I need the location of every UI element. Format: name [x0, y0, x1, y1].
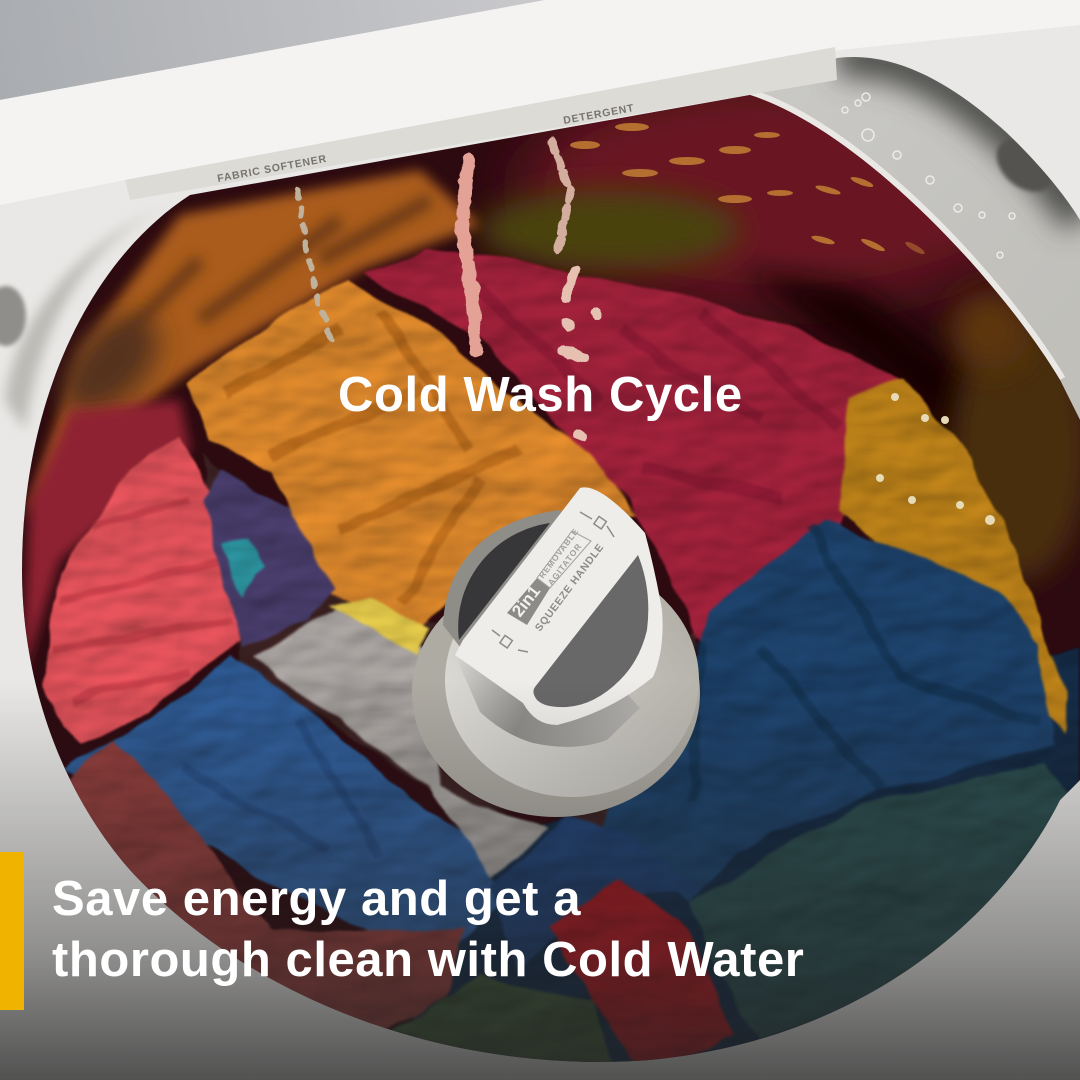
red garment	[365, 246, 905, 640]
coral garment	[38, 435, 238, 745]
navy garment right	[600, 518, 1052, 900]
cup rim	[443, 510, 600, 660]
yellow cloth	[330, 598, 428, 658]
base disc	[412, 569, 700, 817]
lid rim	[0, 0, 1080, 205]
right inner wall	[762, 57, 1080, 420]
cup dark window	[458, 523, 550, 640]
handle text: SQUEEZE HANDLE	[533, 541, 607, 634]
heading: cold wash cycle: Cold Wash Cycle	[338, 368, 743, 422]
handle	[455, 487, 663, 725]
grey mesh window	[533, 555, 648, 707]
green garment	[392, 974, 612, 1062]
bottom fade	[0, 680, 1080, 1080]
maroon garment	[60, 740, 465, 1040]
blue garment left	[60, 652, 505, 960]
laundry pile	[38, 246, 1080, 1080]
wall droplets	[842, 93, 1015, 258]
caption: thorough clean with Cold Water	[52, 933, 804, 987]
label: fabric softener: FABRIC SOFTENER	[216, 153, 328, 185]
drum perforations	[570, 123, 926, 256]
left wall notch	[0, 286, 26, 346]
mustard flowers	[876, 393, 995, 525]
lid window	[0, 0, 545, 100]
handle text: AGITATOR	[546, 541, 584, 587]
dark teal garment	[690, 760, 1075, 1040]
teal cloth	[225, 540, 265, 595]
caption	[52, 872, 804, 987]
dispenser bar	[125, 47, 837, 200]
agitator	[412, 487, 700, 817]
grey towel	[255, 612, 545, 880]
orange garment	[187, 280, 638, 628]
handle text	[492, 512, 614, 652]
handle text: REMOVABLE	[537, 526, 581, 580]
label: detergent: DETERGENT	[562, 102, 635, 127]
caption: Save energy and get a	[52, 872, 581, 926]
left inner wall	[5, 205, 170, 430]
accent bar	[0, 852, 24, 1010]
dark red garment	[548, 880, 735, 1070]
mustard floral garment	[838, 378, 1068, 735]
handle text: 2in1	[508, 582, 544, 620]
purple garment	[205, 465, 335, 645]
cup lower body	[455, 620, 640, 747]
water streams	[297, 142, 597, 437]
